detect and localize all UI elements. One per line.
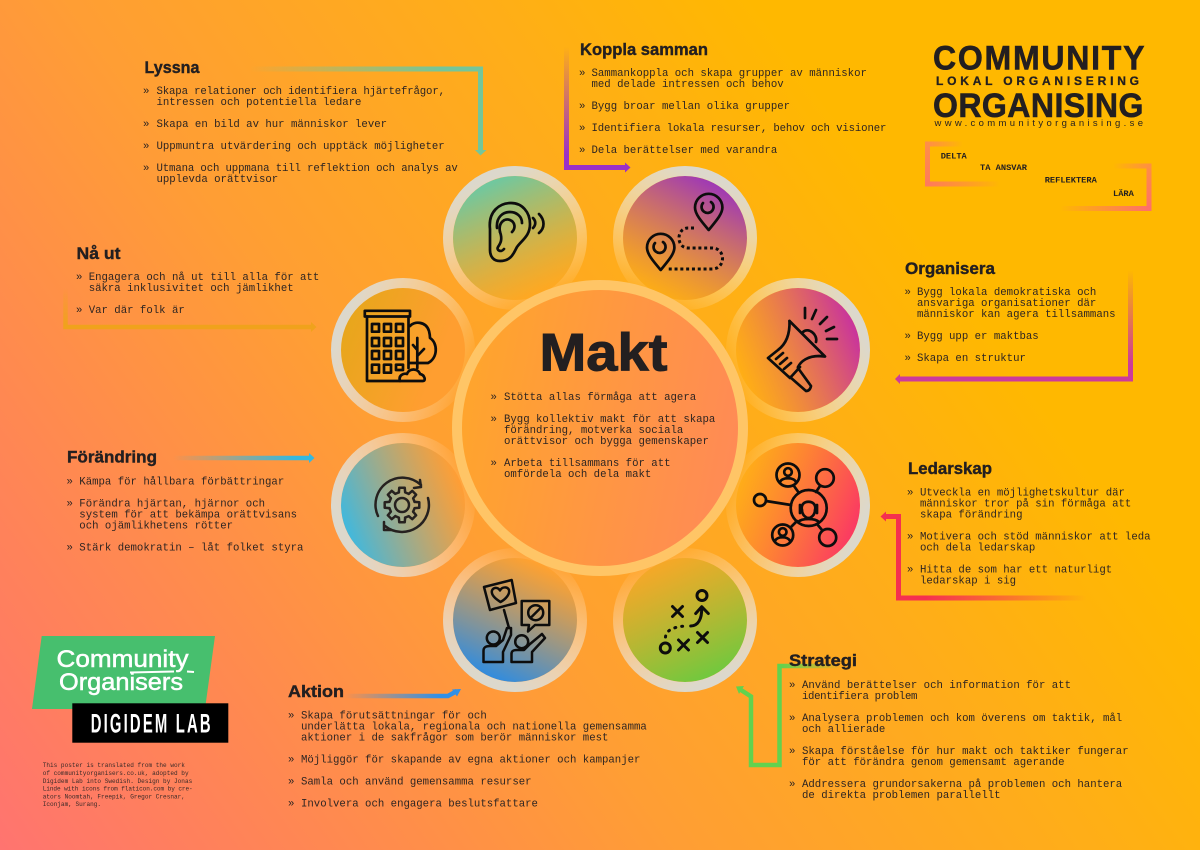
panel: Strategi [618, 553, 1129, 802]
text block: Ledarskap bullets: Hitta de som har ett naturligt [920, 564, 1112, 576]
text block: Aktion bullets [288, 710, 647, 810]
text block: credits: Digidem Lab into Swedish. Design by Jonas [43, 778, 193, 785]
circle: Lyssna [448, 171, 582, 305]
text block: Lyssna bullets: intressen och potentiella ledare [156, 97, 361, 109]
text block: Aktion bullets: » [288, 710, 294, 722]
panel: Ledarskap [731, 438, 1151, 598]
text block: Organisera bullets: » [904, 287, 911, 299]
text block: Lyssna bullets [143, 85, 458, 186]
arrow: Nå ut [66, 288, 316, 332]
text block: Lyssna bullets: » [143, 163, 149, 175]
heading: Koppla samman: Koppla samman [580, 40, 708, 59]
text block: Lyssna bullets: Skapa relationer och identifiera hjärtefrågor, [156, 85, 445, 98]
arrow: Förändring [173, 453, 314, 463]
circle: Strategi [618, 553, 752, 687]
text block: Ledarskap bullets [907, 488, 1151, 588]
panel: Delta, ta ansvar, reflektera, lära: REFLEKTERA [1045, 176, 1098, 186]
heading: Lyssna: Lyssna [144, 58, 200, 77]
circle: Nå ut [336, 283, 470, 417]
icon: map route [647, 194, 722, 270]
heading: Ledarskap: Ledarskap [908, 459, 992, 478]
panel: Lyssna [143, 58, 582, 305]
heading: Makt: Makt [540, 324, 668, 382]
text block: Strategi bullets: Analysera problemen och kom överens om taktik, mål [802, 712, 1122, 725]
circle: Organisera [731, 283, 865, 417]
text block: Koppla samman bullets: Bygg broar mellan olika grupper [592, 101, 790, 113]
text block: credits [43, 762, 193, 808]
text block: Ledarskap bullets: ledarskap i sig [920, 576, 1016, 588]
text block: Nå ut bullets: » [76, 305, 82, 317]
text block: Strategi bullets: » [789, 746, 795, 758]
text block: Koppla samman bullets: » [579, 68, 585, 80]
text block: credits: Iconjam, Surang. [43, 801, 101, 808]
text block: Strategi bullets: för att förändra genom gemensamt agerande [802, 757, 1065, 769]
text block: Makt bullets: Bygg kollektiv makt för att skapa [504, 414, 716, 426]
text block: Koppla samman bullets: med delade intressen och behov [592, 79, 784, 91]
logo: Community Organisers: Community [56, 646, 188, 673]
text block: Organisera bullets: Skapa en struktur [917, 353, 1026, 365]
text block: Förändring bullets: system för att bekämpa orättvisans [79, 510, 297, 522]
text block: Förändring bullets: Kämpa för hållbara förbättringar [79, 476, 284, 488]
text block: Organisera bullets: ansvariga organisationer där [917, 298, 1096, 310]
text block: Strategi bullets: » [789, 713, 795, 725]
circle: Ledarskap [731, 438, 865, 572]
text block: Aktion bullets: » [288, 776, 294, 788]
text block: Aktion bullets: » [288, 798, 294, 810]
text block: Makt bullets: » [490, 392, 497, 404]
text block: Ledarskap bullets: och dela ledarskap [920, 542, 1035, 554]
text block: Makt bullets: » [490, 414, 497, 426]
heading: Strategi: Strategi [789, 651, 857, 670]
text block: Strategi bullets: de direkta problemen parallellt [802, 790, 1001, 802]
text block: Aktion bullets: Möjliggör för skapande av egna aktioner och kampanjer [301, 754, 640, 766]
logo: Community Organising: COMMUNITY [933, 39, 1144, 78]
text block: Makt bullets: Stötta allas förmåga att agera [504, 391, 697, 404]
text block: credits: Linde with icons from flaticon.com by cre- [43, 786, 193, 792]
panel: Koppla samman [566, 40, 886, 305]
text block: Aktion bullets: » [288, 754, 294, 766]
heading: Organisera: Organisera [905, 259, 996, 278]
text block: Aktion bullets: underlätta lokala, regionala och nationella gemensamma [301, 722, 647, 734]
panel: Delta, ta ansvar, reflektera, lära: DELTA [941, 152, 968, 162]
text block: Koppla samman bullets: Sammankoppla och skapa grupper av människor [592, 68, 867, 80]
text block: Strategi bullets: och allierade [802, 724, 885, 736]
text block: Makt bullets: orättvisor och bygga gemenskaper [504, 436, 709, 448]
text block: Förändring bullets: » [66, 542, 73, 554]
text block: Nå ut bullets: Var där folk är [89, 305, 185, 317]
text block: Ledarskap bullets: skapa förändring [920, 510, 1022, 522]
text block: Strategi bullets: Använd berättelser och information för att [802, 680, 1071, 692]
text block: Ledarskap bullets: människor tror på sin förmåga att [920, 498, 1131, 510]
logo: Community Organising [933, 39, 1144, 129]
icon: building and tree [365, 311, 436, 381]
text block: Makt bullets: omfördela och dela makt [504, 469, 651, 481]
panel: Delta, ta ansvar, reflektera, lära: TA ANSVAR [980, 163, 1028, 173]
text block: Strategi bullets: Addressera grundorsakerna på problemen och hantera [802, 778, 1123, 791]
icon: protest [484, 580, 549, 662]
text block: Nå ut bullets: Engagera och nå ut till alla för att [89, 271, 319, 284]
icon: ear [490, 203, 544, 261]
text block: Förändring bullets: Förändra hjärtan, hjärnor och [79, 498, 265, 510]
text block: Lyssna bullets: upplevda orättvisor [156, 174, 278, 186]
text block: Förändring bullets: » [66, 476, 73, 488]
logo: Digidem Lab: DIGIDEM LAB [91, 708, 211, 739]
text block: Aktion bullets: aktioner i de sakfrågor som berör människor mest [301, 732, 608, 744]
panel: Delta, ta ansvar, reflektera, lära: LÄRA [1113, 188, 1135, 199]
text block: Koppla samman bullets: Dela berättelser med varandra [592, 145, 778, 157]
icon: gear cycle [376, 478, 429, 532]
text block: Lyssna bullets: » [143, 141, 149, 153]
text block: Koppla samman bullets [579, 68, 886, 157]
logo: Community Organising: LOKAL ORGANISERING [936, 74, 1139, 88]
text block: Strategi bullets: » [789, 680, 795, 692]
text block: Aktion bullets: Involvera och engagera beslutsfattare [301, 798, 538, 810]
text block: Nå ut bullets: » [76, 272, 82, 284]
logo: Community Organising: www.communityorganising.se [934, 118, 1143, 129]
center circle: Makt [457, 285, 743, 571]
icon: megaphone [768, 308, 837, 391]
text block: Koppla samman bullets: » [579, 145, 585, 157]
logo: Community Organisers: Organisers [59, 669, 183, 696]
logo: Community Organisers [32, 636, 215, 709]
text block: Lyssna bullets: Uppmuntra utvärdering och upptäck möjligheter [156, 141, 445, 153]
icon: tactics [660, 590, 708, 653]
text block: Förändring bullets [66, 476, 304, 554]
text block: Organisera bullets [904, 287, 1116, 365]
text block: Makt bullets [490, 391, 716, 481]
panel: Nå ut [66, 244, 470, 417]
panel: Organisera [731, 259, 1130, 417]
panel: Delta, ta ansvar, reflektera, lära [925, 144, 1152, 208]
text block: Ledarskap bullets: Utveckla en möjlighetskultur där [920, 488, 1125, 500]
circle: Koppla samman [618, 171, 752, 305]
text block: Förändring bullets: och ojämlikhetens rötter [79, 520, 233, 532]
text block: Koppla samman bullets: Identifiera lokala resurser, behov och visioner [592, 123, 886, 135]
arrow: Ledarskap [880, 512, 1087, 598]
text block: Lyssna bullets: Skapa en bild av hur människor lever [156, 119, 387, 131]
heading: Aktion: Aktion [288, 682, 344, 701]
arrow: Organisera [895, 270, 1130, 384]
text block: credits: ators Noomtah, Freepik, Gregor Cresnar, [43, 794, 185, 800]
text block: Organisera bullets: människor kan agera tillsammans [917, 309, 1116, 321]
text block: Ledarskap bullets: » [907, 564, 913, 576]
circle: Aktion [448, 553, 582, 687]
text block: Strategi bullets [789, 680, 1129, 802]
text block: Koppla samman bullets: » [579, 123, 585, 135]
text block: credits: This poster is translated from the work [43, 762, 185, 769]
logo: Digidem Lab [72, 703, 228, 743]
text block: Organisera bullets: Bygg upp er maktbas [917, 331, 1039, 343]
panel: Aktion [288, 553, 647, 810]
text block: Ledarskap bullets: » [907, 532, 913, 544]
text block: credits: of communityorganisers.co.uk, adopted by [43, 770, 189, 777]
text block: Lyssna bullets: » [143, 86, 149, 98]
circle: Förändring [336, 438, 470, 572]
arrow: Koppla samman [566, 47, 630, 172]
logo: Community Organising: ORGANISING [933, 87, 1143, 125]
text block: Aktion bullets: Samla och använd gemensamma resurser [301, 776, 532, 788]
text block: Ledarskap bullets: » [907, 488, 913, 500]
text block: Koppla samman bullets: » [579, 101, 585, 113]
text block: Nå ut bullets [76, 271, 319, 317]
icon: network [754, 464, 836, 546]
text block: Strategi bullets: identifiera problem [802, 691, 917, 703]
text block: Nå ut bullets: säkra inklusivitet och jämlikhet [89, 283, 294, 295]
text block: Organisera bullets: » [904, 353, 911, 365]
panel: Förändring [66, 438, 470, 572]
text block: Förändring bullets: » [66, 498, 73, 510]
text block: Lyssna bullets: » [143, 119, 149, 131]
arrow: Lyssna [250, 69, 486, 156]
text block: Makt bullets: Arbeta tillsammans för att [504, 458, 671, 470]
heading: Förändring: Förändring [67, 448, 157, 466]
text block: Organisera bullets: » [904, 331, 911, 343]
heading: Nå ut: Nå ut [76, 244, 121, 263]
text block: Lyssna bullets: Utmana och uppmana till reflektion och analys av [156, 163, 458, 175]
text block: Strategi bullets: Skapa förståelse för hur makt och taktiker fungerar [802, 745, 1129, 758]
arrow: Strategi [736, 666, 842, 765]
text block: Strategi bullets: » [789, 779, 795, 791]
text block: Makt bullets: » [490, 458, 497, 470]
text block: Aktion bullets: Skapa förutsättningar för och [301, 710, 487, 722]
text block: Förändring bullets: Stärk demokratin – låt folket styra [79, 542, 304, 554]
text block: Ledarskap bullets: Motivera och stöd människor att leda [920, 532, 1151, 544]
text block: Organisera bullets: Bygg lokala demokratiska och [917, 287, 1096, 299]
arrow: Aktion [344, 689, 461, 696]
text block: Makt bullets: förändring, motverka sociala [504, 425, 684, 437]
